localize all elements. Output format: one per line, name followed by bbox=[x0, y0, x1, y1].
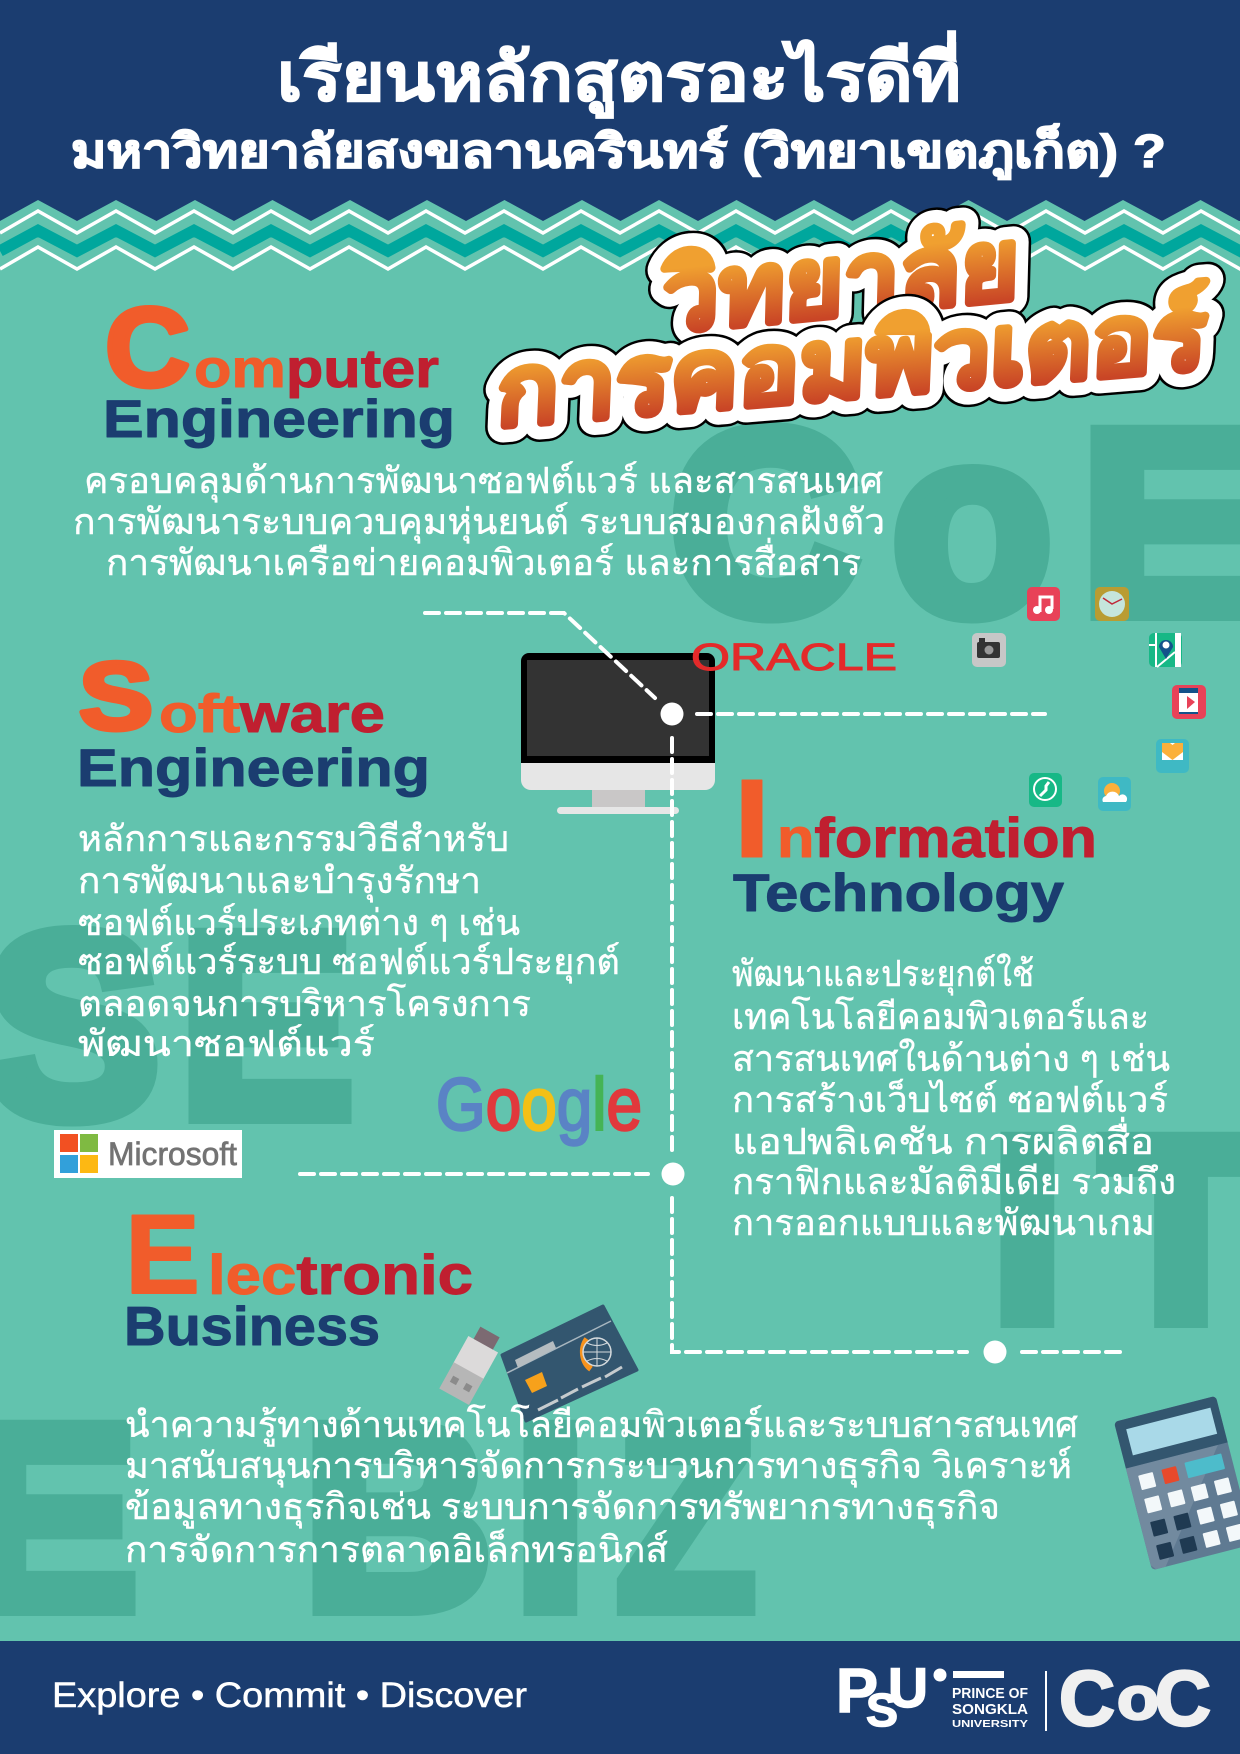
title: มหาวิทยาลัยสงขลานครินทร์ (วิทยาเขตภูเก็ต) ? bbox=[71, 123, 1166, 180]
text: Software Engineering description: ตลอดจนการบริหารโครงการ bbox=[78, 983, 531, 1024]
faculty badge: การคอมพิวเตอร์ bbox=[495, 278, 1209, 447]
background letters: SE: E bbox=[179, 879, 354, 1172]
PSU logo: P bbox=[836, 1657, 878, 1726]
heading: Electronic Business: lectronic bbox=[208, 1243, 473, 1306]
CoC logo: o bbox=[1117, 1665, 1159, 1732]
text: Electronic Business description: การจัดการการตลาดอิเล็กทรอนิกส์ bbox=[125, 1527, 668, 1570]
section: Electronic Business bbox=[124, 1192, 1078, 1570]
heading: Computer Engineering: C bbox=[105, 285, 190, 410]
faculty badge bbox=[495, 208, 1209, 447]
section: Information Technology bbox=[732, 756, 1176, 1243]
icon: music bbox=[1027, 587, 1060, 621]
text: Information Technology description: เทคโนโลยีคอมพิวเตอร์และ bbox=[732, 996, 1149, 1037]
background letters: SE bbox=[0, 879, 354, 1172]
heading: Software Engineering: oftware bbox=[159, 684, 385, 744]
text: Information Technology description: พัฒนาและประยุกต์ใช้ bbox=[732, 953, 1034, 996]
background letters: CoE: o bbox=[892, 376, 1052, 669]
text: Electronic Business description: นำความรู้ทางด้านเทคโนโลยีคอมพิวเตอร์และระบบสารสนเทศ bbox=[125, 1404, 1078, 1447]
PSU logo: S bbox=[866, 1684, 898, 1736]
connector node: bottom bbox=[984, 1340, 1006, 1364]
text: Information Technology description: กราฟิกและมัลติมีเดีย รวมถึง bbox=[732, 1161, 1176, 1202]
title bbox=[71, 30, 1166, 180]
Oracle logo: ORACLE bbox=[691, 637, 897, 679]
heading: Software Engineering: S bbox=[79, 643, 153, 750]
PSU logo: SONGKLA bbox=[952, 1701, 1028, 1718]
Google logo: Google bbox=[436, 1063, 642, 1146]
heading: Software Engineering: Engineering bbox=[77, 739, 430, 798]
text: Information Technology description: การออกแบบและพัฒนาเกม bbox=[732, 1202, 1155, 1243]
text: Electronic Business description: ข้อมูลทางธุรกิจเช่น ระบบการจัดการทรัพยากรทางธุรกิจ bbox=[125, 1486, 1000, 1529]
faculty badge: วิทยาลัย bbox=[660, 208, 1021, 353]
connector node: monitor bbox=[660, 702, 684, 726]
background letters: CoE: C bbox=[670, 376, 859, 669]
Microsoft logo bbox=[54, 1130, 242, 1178]
background letters: IT bbox=[991, 1083, 1240, 1376]
text: Information Technology description: สารสนเทศในด้านต่าง ๆ เช่น bbox=[732, 1038, 1170, 1079]
heading: Computer Engineering: Engineering bbox=[103, 390, 455, 449]
divider bbox=[1045, 1671, 1047, 1731]
heading: Electronic Business: E bbox=[125, 1192, 200, 1317]
heading: Information Technology bbox=[733, 756, 1097, 923]
CoC logo bbox=[1059, 1654, 1211, 1742]
background letters: CoE bbox=[670, 376, 1240, 669]
text: Computer Engineering description: การพัฒนาระบบควบคุมหุ่นยนต์ ระบบสมองกลฝังตัว bbox=[73, 501, 885, 544]
faculty badge: การคอมพิวเตอร์ bbox=[495, 278, 1209, 447]
heading: Electronic Business: Business bbox=[124, 1295, 380, 1357]
text: Software Engineering description: ซอฟต์แวร์ประเภทต่าง ๆ เช่น bbox=[78, 902, 520, 943]
text: Software Engineering description: ซอฟต์แวร์ระบบ ซอฟต์แวร์ประยุกต์ bbox=[78, 941, 620, 984]
icon: calculator bbox=[1114, 1396, 1240, 1570]
footer bbox=[0, 1641, 1240, 1754]
heading: Software Engineering bbox=[77, 643, 430, 798]
text: Electronic Business description: มาสนับสนุนการบริหารจัดการกระบวนการทางธุรกิจ วิเคราะห์ bbox=[125, 1445, 1072, 1488]
heading: Information Technology: nformation bbox=[777, 806, 1097, 869]
section: Computer Engineering bbox=[73, 285, 885, 583]
icon: weather bbox=[1098, 777, 1131, 811]
icon: phone bbox=[1029, 773, 1062, 807]
footer tagline: Explore • Commit • Discover bbox=[52, 1676, 527, 1715]
text: Information Technology description: การสร้างเว็บไซต์ ซอฟต์แวร์ bbox=[732, 1077, 1168, 1120]
heading: Information Technology: I bbox=[733, 756, 771, 881]
text: Software Engineering description bbox=[78, 818, 620, 1064]
text: Software Engineering description: หลักการและกรรมวิธีสำหรับ bbox=[78, 818, 509, 859]
text: Software Engineering description: พัฒนาซอฟต์แวร์ bbox=[78, 1023, 375, 1064]
background letters: E BIZ bbox=[0, 1371, 755, 1664]
PSU logo: UNIVERSITY bbox=[952, 1719, 1028, 1730]
text: Computer Engineering description bbox=[73, 460, 885, 583]
background letters: E BIZ: I bbox=[514, 1371, 587, 1664]
heading: Electronic Business bbox=[124, 1192, 473, 1357]
computer monitor bbox=[521, 653, 715, 814]
background letters: E BIZ: Z bbox=[617, 1371, 755, 1664]
text: Information Technology description bbox=[732, 953, 1176, 1243]
CoC logo: C bbox=[1155, 1654, 1211, 1742]
heading: Information Technology: Technology bbox=[733, 864, 1065, 923]
text: Computer Engineering description: ครอบคลุมด้านการพัฒนาซอฟต์แวร์ และสารสนเทศ bbox=[84, 460, 883, 503]
faculty badge: วิทยาลัย bbox=[660, 208, 1021, 353]
background letters: E BIZ: B bbox=[303, 1371, 492, 1664]
section: Software Engineering bbox=[77, 643, 620, 1064]
Microsoft logo: Microsoft bbox=[108, 1136, 237, 1172]
icon: map bbox=[1149, 633, 1182, 667]
heading: Computer Engineering bbox=[103, 285, 455, 449]
text: Computer Engineering description: การพัฒนาเครือข่ายคอมพิวเตอร์ และการสื่อสาร bbox=[106, 538, 861, 583]
PSU logo: U bbox=[888, 1656, 928, 1719]
icon: credit card bbox=[502, 1306, 637, 1421]
header band bbox=[0, 0, 1240, 269]
faculty badge: การคอมพิวเตอร์ bbox=[495, 278, 1209, 447]
CoC logo: C bbox=[1059, 1654, 1115, 1742]
icon: clock bbox=[1095, 587, 1129, 621]
icon: mail bbox=[1156, 739, 1189, 773]
connector node: Software Engineering bbox=[662, 1162, 684, 1186]
text: Software Engineering description: การพัฒนาและบำรุงรักษา bbox=[78, 860, 481, 903]
text: Electronic Business description bbox=[125, 1404, 1078, 1570]
background letters: IT: I bbox=[991, 1083, 1064, 1376]
text: Information Technology description: แอปพลิเคชัน การผลิตสื่อ bbox=[732, 1117, 1154, 1162]
faculty badge: วิทยาลัย bbox=[660, 208, 1021, 353]
icon: camera bbox=[972, 633, 1006, 667]
icon: video bbox=[1172, 685, 1206, 719]
heading: Computer Engineering: omputer bbox=[194, 339, 439, 399]
PSU logo bbox=[836, 1656, 1028, 1736]
PSU logo: PRINCE OF bbox=[952, 1685, 1028, 1702]
title: เรียนหลักสูตรอะไรดีที่ bbox=[277, 30, 961, 119]
icon: USB drive bbox=[439, 1324, 505, 1405]
dashed connectors bbox=[300, 613, 1120, 1352]
